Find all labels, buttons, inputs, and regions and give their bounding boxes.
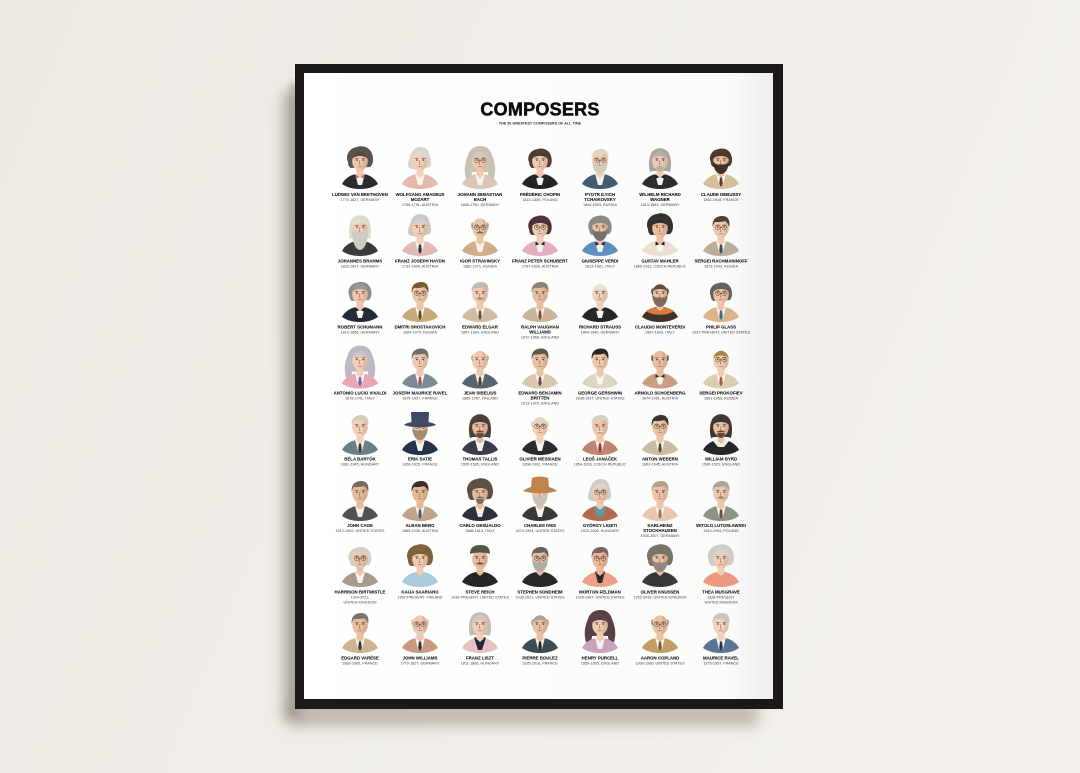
portrait	[522, 215, 558, 256]
name: 1900-1990, UNITED STATES	[635, 662, 685, 666]
name: 1797-1828, AUSTRIA	[522, 264, 559, 268]
name: WAGNER	[650, 197, 671, 202]
portrait	[522, 417, 558, 455]
name: 1934-2022,	[351, 596, 369, 600]
portrait	[522, 282, 558, 322]
name: 1912-1992, UNITED STATES	[335, 529, 385, 533]
name: CLAUDE DEBUSSY	[701, 192, 741, 197]
name: GUSTAV MAHLER	[641, 258, 679, 264]
name: 1567-1643, ITALY	[645, 330, 675, 334]
name: THEA MUSGRAVE	[702, 590, 740, 594]
name: 1874-1954, UNITED STATES	[515, 529, 565, 533]
name: 1857-1934, ENGLAND	[461, 330, 499, 334]
name: STEPHEN SONDHEIM	[517, 590, 563, 594]
portrait	[402, 412, 438, 455]
name: 1756-1791, AUSTRIA	[402, 203, 439, 207]
name: 1566-1613, ITALY	[465, 529, 495, 533]
portrait	[703, 481, 739, 521]
portrait	[342, 215, 378, 256]
portrait	[582, 610, 618, 653]
portrait	[642, 415, 678, 455]
portrait	[402, 214, 438, 256]
name: 1770-1827, GERMANY	[341, 198, 380, 202]
white poster sheet	[304, 73, 773, 699]
name: 1883-1945, AUSTRIA	[642, 462, 679, 466]
composer: Vaughan Williams	[521, 282, 559, 340]
composer: Musgrave	[702, 544, 740, 604]
composer: Varèse	[341, 613, 379, 666]
name: 1925-2016, FRANCE	[522, 662, 558, 666]
composer: Byrd	[702, 414, 740, 466]
name: 1505-1585, ENGLAND	[461, 462, 499, 466]
portrait	[342, 481, 378, 521]
name: 1833-1897, GERMANY	[341, 264, 380, 268]
portrait	[582, 348, 618, 388]
portrait	[342, 146, 378, 189]
name: HENRY PURCELL	[582, 656, 619, 660]
title: COMPOSERS	[480, 100, 600, 120]
portrait	[342, 282, 378, 322]
composer: Mahler	[634, 213, 687, 268]
composer: Reich	[451, 545, 509, 600]
portrait	[522, 348, 558, 388]
portrait	[642, 284, 678, 322]
portrait	[462, 218, 498, 256]
name: KARLHEINZ	[647, 523, 673, 528]
name: FRANZ JOSEPH HAYDN	[395, 258, 445, 264]
name: DMITRI SHOSTAKOVICH	[395, 324, 445, 330]
name: BÉLA BARTÓK	[344, 456, 377, 462]
name: GIUSEPPE VERDI	[582, 258, 618, 264]
name: STOCKHAUSEN	[643, 528, 677, 533]
name: 1873-1943, RUSSIA	[704, 264, 738, 268]
name: 1685-1750, GERMANY	[461, 203, 500, 207]
name: 1906-1975, RUSSIA	[403, 330, 437, 334]
composer: Debussy	[701, 149, 741, 202]
composer: Knussen	[634, 544, 686, 600]
portrait	[462, 545, 498, 587]
name: JEAN SIBELIUS	[464, 390, 497, 396]
name: 1913-1994, POLAND	[703, 529, 739, 533]
name: FRÉDÉRIC CHOPIN	[520, 192, 560, 197]
composer: Messiaen	[519, 417, 561, 466]
portrait	[462, 146, 498, 189]
name: 1540-1623, ENGLAND	[702, 462, 740, 466]
portrait	[402, 282, 438, 322]
portrait	[642, 351, 678, 388]
name: WILHELM RICHARD	[639, 192, 681, 197]
name: JOHN CAGE	[347, 523, 373, 528]
composer: Gershwin	[575, 348, 625, 400]
portrait	[582, 479, 618, 521]
portrait	[642, 615, 678, 653]
name: FRANZ PETER SCHUBERT	[512, 258, 568, 264]
composer: Janáček	[574, 415, 627, 466]
name: MAURICE RAVEL	[703, 656, 739, 660]
name: WILLIAM BYRD	[705, 456, 737, 462]
name: RICHARD STRAUSS	[579, 324, 621, 330]
composer: Strauss	[579, 284, 621, 334]
portrait	[642, 213, 678, 256]
name: WOLFGANG AMADEUS	[396, 192, 445, 197]
composer: Gesualdo	[459, 478, 501, 533]
portrait	[462, 282, 498, 322]
name: CARLO GESUALDO	[459, 523, 501, 528]
portrait	[703, 414, 739, 455]
composer: Cage	[335, 481, 385, 533]
name: 1840-1893, RUSSIA	[583, 203, 617, 207]
name: IGOR STRAVINSKY	[460, 258, 500, 264]
composer: Berg	[402, 481, 439, 533]
name: ROBERT SCHUMANN	[338, 324, 382, 330]
composer: Glass	[692, 283, 750, 334]
name: TCHAIKOVSKY	[584, 197, 616, 202]
name: 1882-1971, RUSSIA	[463, 264, 497, 268]
composer: Schubert	[512, 215, 568, 268]
name: 1813-1883, GERMANY	[641, 203, 680, 207]
portrait	[703, 613, 739, 653]
frame shadow	[283, 82, 758, 726]
composer: Saariaho	[397, 544, 443, 600]
name: ANTONIO LUCIO VIVALDI	[334, 390, 386, 396]
portrait	[402, 615, 438, 653]
composer: Tchaikovsky	[582, 149, 618, 207]
name: ARNOLD SCHOENBERG	[635, 390, 686, 396]
name: 1678-1741, ITALY	[345, 396, 375, 400]
name: 1860-1911, CZECH REPUBLIC	[634, 264, 687, 268]
composer: Birtwistle	[335, 547, 386, 604]
name: OLIVIER MESSIAEN	[519, 456, 561, 462]
name: CLAUDIO MONTEVERDI	[635, 324, 685, 330]
composer: Beethoven	[332, 146, 388, 202]
name: 1770-1827, GERMANY	[401, 662, 440, 666]
name: 1811-1886, HUNGARY	[461, 662, 500, 666]
portrait	[522, 148, 558, 189]
portrait	[582, 149, 618, 189]
portrait	[342, 415, 378, 455]
portrait	[582, 215, 618, 256]
name: JOHANN SEBASTIAN	[458, 192, 502, 197]
composer: Stravinsky	[460, 218, 500, 268]
composer: Schoenberg	[635, 351, 686, 400]
portrait	[642, 481, 678, 521]
subtitle: THE 56 GREATEST COMPOSERS OF ALL TIME	[499, 122, 582, 126]
name: KAIJA SAARIAHO	[401, 590, 439, 594]
name: PIERRE BOULEZ	[522, 656, 558, 660]
composer: Monteverdi	[635, 284, 685, 334]
name: HARRISON BIRTWISTLE	[335, 590, 386, 594]
portrait	[342, 613, 378, 653]
composer: Elgar	[461, 282, 499, 334]
name: EDWARD BENJAMIN	[518, 390, 562, 396]
name: 1930-2021, UNITED STATES	[515, 596, 565, 600]
name: FRANZ LISZT	[466, 656, 494, 660]
portrait	[703, 216, 739, 256]
name: 1952-2018, UNITED KINGDOM	[634, 596, 686, 600]
portrait	[462, 351, 498, 388]
composer: Prokofiev	[699, 351, 743, 400]
name: CHARLES IVES	[524, 523, 556, 528]
composer: Schumann	[338, 282, 382, 334]
portrait	[642, 148, 678, 189]
portrait	[462, 478, 498, 521]
name: MORTON FELDMAN	[579, 590, 621, 594]
name: 1865-1957, FINLAND	[462, 396, 498, 400]
name: 1926-1987, UNITED STATES	[575, 596, 625, 600]
portrait	[703, 283, 739, 322]
composer: Rachmaninoff	[694, 216, 748, 268]
portrait	[582, 284, 618, 322]
composer: Bartók	[341, 415, 380, 466]
composer: Chopin	[520, 148, 560, 202]
name: 1936-PRESENT, UNITED STATES	[451, 596, 509, 600]
name: LEOŠ JANÁČEK	[583, 456, 618, 462]
name: JOHANNES BRAHMS	[338, 258, 382, 264]
portrait	[703, 544, 739, 587]
composer: Britten	[518, 348, 562, 406]
name: ALBAN BERG	[406, 523, 435, 528]
portrait	[462, 414, 498, 455]
name: 1908-1992, FRANCE	[522, 462, 558, 466]
composer: Tallis	[461, 414, 499, 466]
composer: Ligeti	[581, 479, 620, 533]
portrait	[522, 615, 558, 653]
composer: Bach	[458, 146, 502, 207]
name: 1928-PRESENT,	[707, 596, 735, 600]
name: OLIVER KNUSSEN	[641, 590, 679, 594]
name: SERGEI RACHMANINOFF	[694, 258, 748, 264]
composer: Verdi	[582, 215, 618, 268]
name: WITOLD LUTOSŁAWSKI	[696, 523, 746, 528]
composer: Lutosławski	[696, 481, 746, 533]
name: 1810-1849, POLAND	[522, 198, 558, 202]
name: SERGEI PROKOFIEV	[699, 390, 743, 396]
name: 1883-1965, FRANCE	[342, 662, 378, 666]
composer: Sibelius	[462, 351, 498, 400]
name: ERIK SATIE	[408, 456, 432, 462]
name: WILLIAMS	[529, 330, 551, 334]
name: 1862-1918, FRANCE	[703, 198, 739, 202]
name: UNITED KINGDOM	[344, 600, 376, 604]
portrait	[703, 149, 739, 189]
name: LUDWIG VAN BEETHOVEN	[332, 192, 388, 197]
name: 1874-1951, AUSTRIA	[642, 396, 679, 400]
portrait	[342, 346, 378, 388]
composer: Mozart	[396, 147, 445, 207]
name: 1813-1901, ITALY	[585, 264, 615, 268]
composer: Copland	[635, 615, 685, 666]
name: 1872-1958, ENGLAND	[521, 336, 559, 340]
name: 1937-PRESENT, UNITED STATES	[692, 330, 750, 334]
composer: Maurice Ravel	[703, 613, 739, 666]
portrait	[342, 547, 378, 587]
composer: Feldman	[575, 547, 625, 600]
composer: Wagner	[639, 148, 681, 207]
name: EDGARD VARÈSE	[341, 656, 379, 660]
composer: Ives	[515, 476, 565, 533]
name: AARON COPLAND	[641, 656, 679, 660]
name: 1898-1937, UNITED STATES	[575, 396, 625, 400]
name: UNITED KINGDOM	[705, 600, 737, 604]
portrait	[402, 147, 438, 189]
name: JOSEPH MAURICE RAVEL	[393, 390, 448, 396]
name: RALPH VAUGHAN	[521, 324, 559, 330]
composer: Joseph Maurice Ravel	[393, 348, 448, 400]
name: 1875-1937, FRANCE	[402, 396, 438, 400]
name: PYOTR ILYICH	[585, 192, 615, 197]
name: 1913-1976, ENGLAND	[521, 402, 559, 406]
name: 1866-1925, FRANCE	[402, 462, 438, 466]
name: BACH	[474, 197, 486, 202]
portrait	[402, 481, 438, 521]
composer: Shostakovich	[395, 282, 445, 334]
name: GYÖRGY LIGETI	[583, 523, 617, 528]
name: 1732-1809, AUSTRIA	[402, 264, 439, 268]
portrait	[522, 476, 558, 521]
portrait	[582, 415, 618, 455]
name: GEORGE GERSHWIN	[578, 390, 622, 396]
composer: Boulez	[522, 615, 558, 666]
name: ANTON WEBERN	[642, 456, 678, 462]
name: EDWARD ELGAR	[462, 324, 499, 330]
name: JOHN WILLIAMS	[403, 656, 437, 660]
composer: John Williams	[401, 615, 440, 666]
name: 1659-1695, ENGLAND	[581, 662, 619, 666]
name: STEVE REICH	[466, 590, 494, 594]
composer: Brahms	[338, 215, 382, 268]
name: MOZART	[411, 197, 430, 202]
portrait	[402, 348, 438, 388]
name: THOMAS TALLIS	[463, 456, 498, 462]
portrait	[642, 544, 678, 587]
name: 1952-PRESENT, FINLAND	[397, 596, 443, 600]
name: 1923-2006, HUNGARY	[581, 529, 620, 533]
name: 1885-1935, AUSTRIA	[402, 529, 439, 533]
portrait	[703, 351, 739, 388]
name: 1810-1856, GERMANY	[341, 330, 380, 334]
composer: Sondheim	[515, 547, 565, 600]
composer: Haydn	[395, 214, 445, 268]
name: 1891-1953, RUSSIA	[704, 396, 738, 400]
name: 1875-1937, FRANCE	[703, 662, 739, 666]
black picture frame	[295, 64, 783, 709]
name: BRITTEN	[531, 396, 549, 400]
portrait	[582, 547, 618, 587]
composer: Satie	[402, 412, 438, 466]
composer: Webern	[642, 415, 679, 466]
name: 1928-2007, GERMANY	[641, 534, 680, 538]
portrait	[402, 544, 438, 587]
composer: Liszt	[461, 612, 500, 666]
name: 1881-1945, HUNGARY	[341, 462, 380, 466]
name: 1854-1928, CZECH REPUBLIC	[574, 462, 627, 466]
name: PHILIP GLASS	[706, 324, 736, 330]
composer: Purcell	[581, 610, 619, 666]
portrait	[522, 547, 558, 587]
portrait	[462, 612, 498, 653]
name: 1864-1949, GERMANY	[581, 330, 620, 334]
composer: Vivaldi	[334, 346, 386, 400]
composer: Stockhausen	[641, 481, 680, 538]
